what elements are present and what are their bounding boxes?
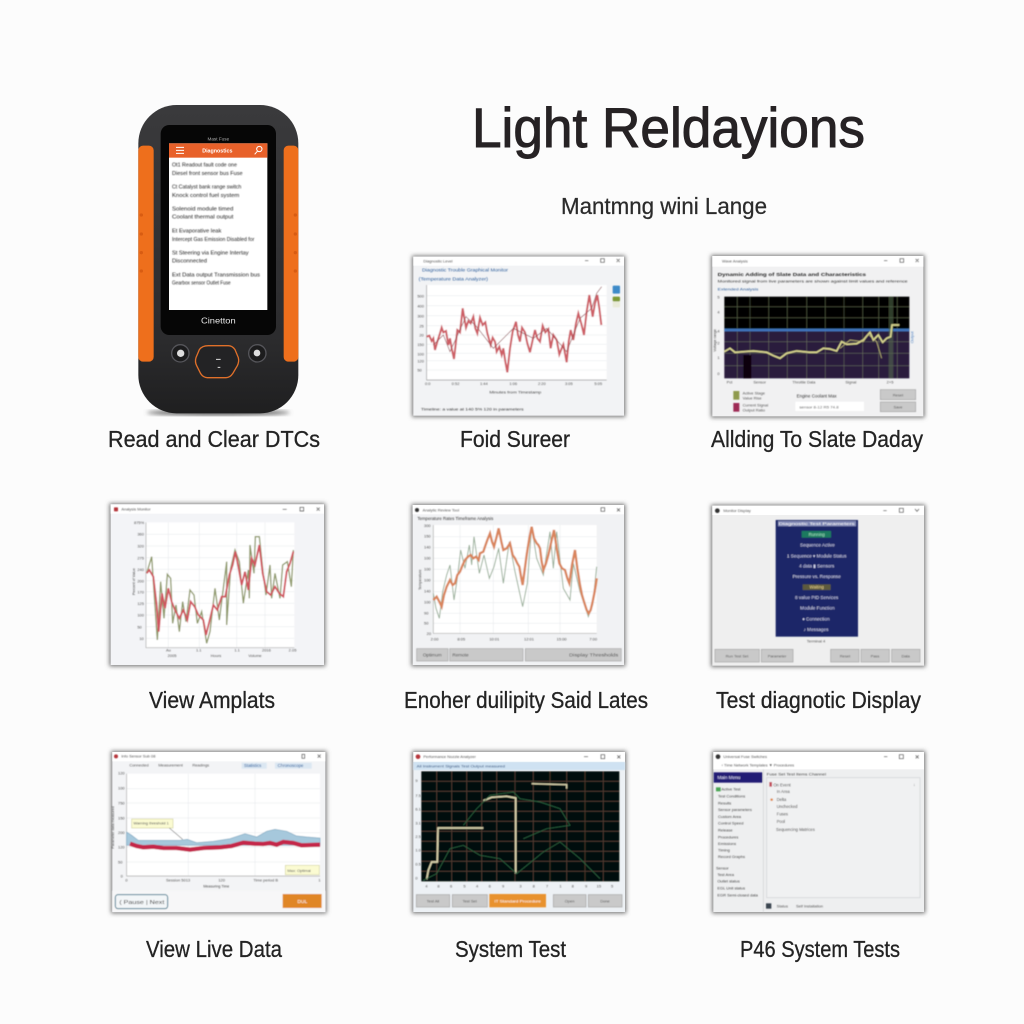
window: bottom centre system test scope: 0.5 — [415, 861, 422, 866]
device screen: Coolant thermal output — [172, 215, 234, 221]
window: bottom right system tests list: Pool — [777, 819, 785, 824]
window: top right oscilloscope: 5 — [717, 294, 720, 299]
window: top right oscilloscope: Current Signal — [743, 402, 768, 407]
device: handheld scanner: Mast Fuse — [207, 137, 230, 142]
caption: P46 System Tests — [740, 936, 900, 962]
window: bottom right system tests list — [712, 751, 925, 913]
window: bottom centre system test scope: 6.1 — [415, 806, 422, 811]
device screen: St Steering via Engine Intertay — [172, 250, 249, 256]
window: bottom centre system test scope: 4 — [476, 883, 479, 888]
window: bottom centre system test scope: 5 — [611, 883, 614, 888]
window: top middle chart: Timeline: a value at 140 5% 120 in parameters — [421, 406, 524, 411]
window: middle centre chart: 7:00 — [589, 637, 598, 642]
window: bottom left live data chart: 1 — [318, 877, 321, 882]
window: top right oscilloscope: 4 — [717, 309, 720, 314]
device screen: Intercept Gas Emission Disabled for — [172, 237, 255, 243]
window: middle right diagnostic display: Sequence Active — [800, 543, 835, 548]
window: bottom centre system test scope: 8 — [572, 883, 575, 888]
window: bottom left live data chart: Info Sensor Sub 08 — [121, 754, 156, 759]
window: bottom right system tests list: Self Installation — [796, 904, 823, 909]
window: bottom right system tests list: ‹ Time Network Templates ▼ Procedures — [722, 763, 794, 768]
device screen: Et Evaporative leak — [172, 229, 222, 235]
subtitle: Mantmng wini Lange — [561, 193, 767, 219]
window: bottom left live data chart: 120 — [218, 877, 226, 882]
window: bottom left live data chart: Parameter data measured — [111, 806, 115, 849]
window: middle centre chart: 20 — [427, 631, 432, 636]
window: bottom left live data chart: Connected — [129, 762, 149, 767]
window: middle centre chart: 100 — [424, 555, 431, 560]
caption: Enoher duilipity Said Lates — [404, 687, 648, 713]
window: bottom centre system test scope: All Instrument Signals Test Output measured — [417, 763, 505, 768]
window: middle left chart: 50 — [137, 624, 143, 629]
window: bottom right system tests list: Active Test — [721, 787, 741, 792]
window: bottom right system tests list: Fuses — [777, 812, 788, 817]
window: top right oscilloscope: 1 — [717, 355, 720, 360]
window: bottom centre system test scope: 6 — [450, 883, 453, 888]
window: top right oscilloscope: 0 — [717, 371, 720, 376]
window: top right oscilloscope: Reset — [893, 392, 904, 397]
window: middle left chart: 240 — [137, 567, 145, 572]
window: top right oscilloscope: Save — [893, 404, 903, 409]
device screen: Solenoid module timed — [172, 207, 233, 213]
window: middle left chart: 125 — [137, 601, 145, 606]
window: middle right diagnostic display: Data — [901, 653, 911, 658]
window: middle right diagnostic display: 8 value PID Services — [795, 595, 839, 600]
window: top middle chart: 0:0 — [425, 381, 431, 386]
window: bottom left live data chart: 200 — [118, 830, 125, 835]
window: bottom right system tests list: Sensor parameters — [718, 807, 752, 812]
caption: System Test — [455, 936, 567, 962]
window: top middle chart: 1:06 — [509, 381, 518, 386]
window: bottom centre system test scope: 7.5 — [415, 793, 422, 798]
device screen: Diagnostics — [202, 148, 232, 154]
window: bottom right system tests list: Status — [777, 904, 788, 909]
window: bottom left live data chart: Chronoscope — [278, 763, 304, 768]
window: bottom right system tests list: ↓ — [913, 782, 915, 787]
window: bottom left live data chart: Session 5013 — [166, 877, 191, 882]
window: middle right diagnostic display: Parameter — [768, 653, 787, 658]
window: bottom right system tests list: Sequencing Matrices — [776, 827, 815, 832]
window: top middle chart — [412, 256, 625, 417]
device screen: Ext Data output Transmission bus — [172, 272, 260, 278]
window: middle centre chart: 15:00 — [557, 637, 567, 642]
device screen: Ct Catalyst bank range switch — [172, 185, 241, 191]
window: top middle chart: 100 — [417, 351, 425, 356]
window: bottom centre system test scope: Done — [600, 898, 611, 903]
caption: Foid Sureer — [460, 426, 570, 452]
window: top middle chart: 1:44 — [480, 381, 489, 386]
window: middle right diagnostic display: 4 data ▮ Sensors — [799, 564, 835, 569]
window: middle centre chart: 100 — [424, 578, 431, 583]
window: bottom right system tests list: Outlet status — [717, 879, 740, 884]
window: top middle chart: 25 — [419, 323, 425, 328]
window: top middle chart: 2:20 — [538, 381, 547, 386]
window: top right oscilloscope: 2 — [717, 340, 720, 345]
window: bottom centre system test scope: Performance Nozzle Analyzer — [423, 754, 476, 759]
window: middle centre chart: 100 — [424, 567, 431, 572]
window: bottom right system tests list: Results — [718, 800, 731, 805]
window: middle centre chart: 100 — [424, 600, 431, 605]
window: top middle chart: Diagnostic Level — [423, 258, 453, 263]
window: bottom left live data chart: 0 — [121, 873, 124, 878]
window: bottom centre system test scope: Test All — [427, 898, 439, 903]
window: middle left chart: 10 — [139, 636, 145, 641]
window: top right oscilloscope: Signal — [845, 379, 857, 384]
window: middle left chart: 2016 — [262, 648, 272, 653]
window: top middle chart: 0:52 — [452, 381, 460, 386]
window: middle right diagnostic display: 1 Sequence ▾ Module Status — [787, 553, 847, 558]
window: top right oscilloscope: Wave Analysis — [722, 258, 748, 263]
window: bottom left live data chart: Readings — [192, 762, 209, 767]
window: middle left chart: 1.1 — [234, 648, 241, 653]
window: top middle chart: 50 — [417, 368, 423, 373]
window: bottom left live data chart: 50 — [118, 859, 123, 864]
window: middle centre chart: Analytic Review Tool — [423, 507, 459, 512]
window: top right oscilloscope: Engine Coolant Max — [797, 394, 838, 399]
window: bottom left live data chart: Max: Optimal — [287, 868, 311, 873]
window: middle right diagnostic display: Terminal 4 — [807, 639, 826, 644]
window: middle left chart — [109, 503, 325, 666]
window: top right oscilloscope: 2+5 — [887, 379, 894, 384]
window: middle centre chart: 12:01 — [524, 637, 535, 642]
window: middle centre chart: Optimum — [423, 653, 442, 658]
window: middle centre chart: 140 — [424, 589, 431, 594]
window: bottom right system tests list: On Event — [773, 782, 792, 787]
window: bottom right system tests list: Test Conditions — [718, 793, 745, 798]
window: top right oscilloscope: Output Ratio — [743, 407, 766, 412]
window: bottom right system tests list: In Area — [777, 789, 791, 794]
window: top right oscilloscope: Active Stage — [743, 391, 766, 396]
window: bottom right system tests list: Custom Area — [718, 814, 742, 819]
window: middle left chart: 320 — [137, 543, 145, 548]
window: bottom centre system test scope: 15 — [597, 883, 602, 888]
window: middle left chart: 170 — [137, 589, 145, 594]
window: bottom right system tests list: Universal Fuse Switches — [723, 754, 767, 759]
window: bottom centre system test scope: IT Standard Procedure — [494, 898, 542, 903]
window: middle left chart: 2005 — [168, 653, 177, 658]
window: bottom centre system test scope: 1.0 — [415, 847, 422, 852]
window: bottom centre system test scope: 8 — [533, 883, 536, 888]
title: Light Reldayions — [472, 96, 865, 159]
window: middle left chart: 100 — [137, 613, 145, 618]
caption: View Live Data — [146, 936, 282, 962]
caption: View Amplats — [149, 687, 275, 713]
window: bottom left live data chart: 120 — [118, 845, 125, 850]
window: bottom left live data chart: DUL — [297, 899, 308, 905]
window: bottom centre system test scope: 6 — [489, 883, 492, 888]
window: bottom right system tests list: Record Graphs — [718, 854, 745, 859]
window: bottom left live data chart — [111, 751, 327, 913]
device screen — [169, 143, 267, 310]
window: middle left chart: 360 — [137, 532, 145, 537]
window: bottom centre system test scope: Open — [565, 898, 575, 903]
window: top right oscilloscope: Voltage range — [713, 329, 717, 352]
window: bottom right system tests list: Fuse Set Test Items Channel — [767, 771, 826, 776]
window: bottom left live data chart: 750 — [118, 801, 125, 806]
window: bottom left live data chart: Time period B — [253, 877, 278, 882]
window: top right oscilloscope: 4 — [717, 328, 720, 333]
window: middle left chart: Analysis Monitor — [121, 507, 151, 512]
window: top right oscilloscope: sensor 8-12 R5 74.8 — [799, 404, 840, 409]
window: top middle chart: 150 — [417, 342, 425, 347]
window: middle left chart: Percent of Value — [132, 568, 136, 595]
window: bottom right system tests list: EGL Unit status — [717, 886, 745, 891]
device screen: Diesel front sensor bus Fuse — [172, 171, 243, 177]
window: bottom centre system test scope: 9 — [415, 778, 418, 783]
caption: Read and Clear DTCs — [108, 426, 320, 452]
window: middle right diagnostic display: Pass — [871, 653, 879, 658]
window: bottom left live data chart: 0 — [125, 877, 128, 882]
window: bottom centre system test scope: 2.5 — [415, 834, 422, 839]
window: top middle chart: 3:05 — [565, 381, 574, 386]
window: bottom centre system test scope: 9 — [585, 883, 588, 888]
window: bottom left live data chart: Measurement — [158, 762, 184, 767]
device screen: Ot1 Readout fault code one — [172, 163, 237, 169]
window: top right oscilloscope: Pct — [727, 379, 733, 384]
window: top middle chart: 400 — [417, 304, 425, 309]
window: bottom centre system test scope: 3 — [519, 883, 522, 888]
window: bottom left live data chart: ( Pause | Next — [119, 900, 165, 906]
window: bottom left live data chart: Warning threshold 1 — [133, 821, 170, 826]
window: top right oscilloscope — [711, 255, 925, 418]
window: middle left chart: 2.05 — [289, 648, 297, 653]
window: middle centre chart: 50 — [424, 621, 429, 626]
window: middle centre chart: 8:05 — [457, 637, 466, 642]
window: top right oscilloscope: Dynamic Adding of Slate Data and Characteristics — [718, 272, 866, 278]
window: top middle chart: 20 — [419, 333, 425, 338]
window: bottom centre system test scope: 7 — [546, 883, 549, 888]
window: middle right diagnostic display: Running — [809, 532, 825, 537]
window: middle centre chart: 300 — [424, 523, 431, 528]
window: middle right diagnostic display: Pressure vs. Response — [793, 574, 841, 579]
window: middle centre chart: 10:01 — [489, 637, 500, 642]
device brand: Cinetton — [201, 317, 236, 326]
window: middle left chart: 875% — [134, 520, 145, 525]
window: bottom right system tests list: Test Area — [717, 872, 735, 877]
window: middle right diagnostic display: Reset — [840, 653, 851, 658]
window: bottom centre system test scope: 4 — [425, 883, 428, 888]
window: middle left chart: Hours — [211, 653, 221, 658]
window: bottom left live data chart: 100 — [118, 786, 125, 791]
window: top right oscilloscope: Monitored signal from live parameters are shown against limit values and reference — [718, 279, 909, 284]
window: middle right diagnostic display: Run Test Set — [726, 653, 749, 658]
window: bottom left live data chart: Statistics — [244, 763, 261, 768]
window: middle right diagnostic display: Waiting — [810, 585, 824, 590]
window: bottom left live data chart: 150 — [118, 815, 125, 820]
device screen: Disconnected — [172, 259, 207, 265]
window: bottom right system tests list: Timing — [718, 847, 730, 852]
window: bottom right system tests list: Delta — [777, 797, 787, 802]
window: middle centre chart: Display Thresholds — [569, 653, 619, 658]
window: bottom right system tests list: Main Menu — [717, 775, 741, 780]
window: bottom left live data chart: Measuring Time — [203, 884, 229, 888]
window: bottom right system tests list: Procedures — [718, 834, 738, 839]
window: middle left chart: 275 — [137, 555, 145, 560]
window: top right oscilloscope: Extended Analysis — [718, 286, 758, 291]
window: top right oscilloscope: Value Rise — [743, 396, 762, 401]
window: top middle chart: (Temperature Data Analyzer) — [419, 276, 489, 281]
window: middle centre chart: 2:00 — [431, 637, 439, 642]
window: bottom centre system test scope: 3.1 — [415, 821, 422, 826]
window: middle centre chart: 140 — [424, 544, 431, 549]
window: bottom centre system test scope — [412, 751, 626, 913]
window: bottom centre system test scope: Test Set — [462, 898, 478, 903]
window: bottom centre system test scope: 0 — [415, 875, 418, 880]
window: middle centre chart: Temperature Rates Timeframe Analysis — [417, 516, 493, 521]
window: top right oscilloscope: Output — [909, 330, 914, 343]
window: bottom centre system test scope: 1 — [559, 883, 562, 888]
window: middle centre chart: 90 — [424, 610, 429, 615]
window: bottom left live data chart: 120 — [118, 771, 125, 776]
window: top middle chart: 300 — [417, 314, 425, 319]
window: top right oscilloscope: Sensor — [753, 379, 767, 384]
window: bottom right system tests list: Sensor — [716, 865, 729, 870]
device: handheld scanner — [138, 105, 298, 416]
caption: Test diagnotic Display — [716, 687, 921, 713]
window: middle left chart: 1.1 — [196, 648, 202, 653]
device buttons — [172, 345, 266, 378]
window: top middle chart: Diagnostic Trouble Graphical Monitor — [422, 268, 508, 273]
window: middle left chart: Au — [166, 648, 171, 653]
window: bottom right system tests list: Release — [718, 827, 733, 832]
window: bottom centre system test scope: 9 — [502, 883, 505, 888]
window: bottom centre system test scope: 8 — [437, 883, 440, 888]
window: bottom centre system test scope: 5 — [463, 883, 466, 888]
window: middle right diagnostic display: Monitor Display — [723, 508, 751, 513]
window: middle right diagnostic display: ♦ Connection — [802, 616, 830, 621]
window: middle centre chart: 150 — [424, 533, 431, 538]
window: middle right diagnostic display: Diagnostic Test Parameters — [779, 521, 855, 526]
window: top middle chart: Minutes from Timestamp — [489, 389, 542, 394]
window: bottom right system tests list: Control Speed — [718, 821, 743, 826]
device screen: Gearbox sensor Outlet Fuse — [172, 281, 231, 287]
window: middle right diagnostic display — [711, 505, 925, 667]
window: middle right diagnostic display: ♪ Messages — [804, 627, 829, 632]
window: bottom right system tests list: Unchecked — [777, 804, 798, 809]
window: top middle chart: 120 — [417, 358, 425, 363]
window: top middle chart: 5:05 — [594, 381, 603, 386]
window: bottom right system tests list: EGR Semi-closed data — [717, 892, 759, 897]
caption: Allding To Slate Daday — [711, 426, 923, 452]
window: middle centre chart — [411, 504, 625, 666]
window: middle centre chart: Remote — [452, 653, 469, 658]
window: top right oscilloscope: Throttle Data — [792, 379, 816, 384]
device body — [138, 105, 298, 413]
window: top middle chart: 500 — [417, 294, 425, 299]
window: middle left chart: Volume — [248, 653, 262, 658]
window: middle left chart: 200 — [137, 578, 145, 583]
window: middle right diagnostic display: Module Function — [800, 606, 835, 611]
window: bottom right system tests list: Emissions — [718, 841, 736, 846]
device screen: Knock control fuel system — [172, 193, 239, 199]
window: middle centre chart: Temperature — [418, 569, 422, 590]
